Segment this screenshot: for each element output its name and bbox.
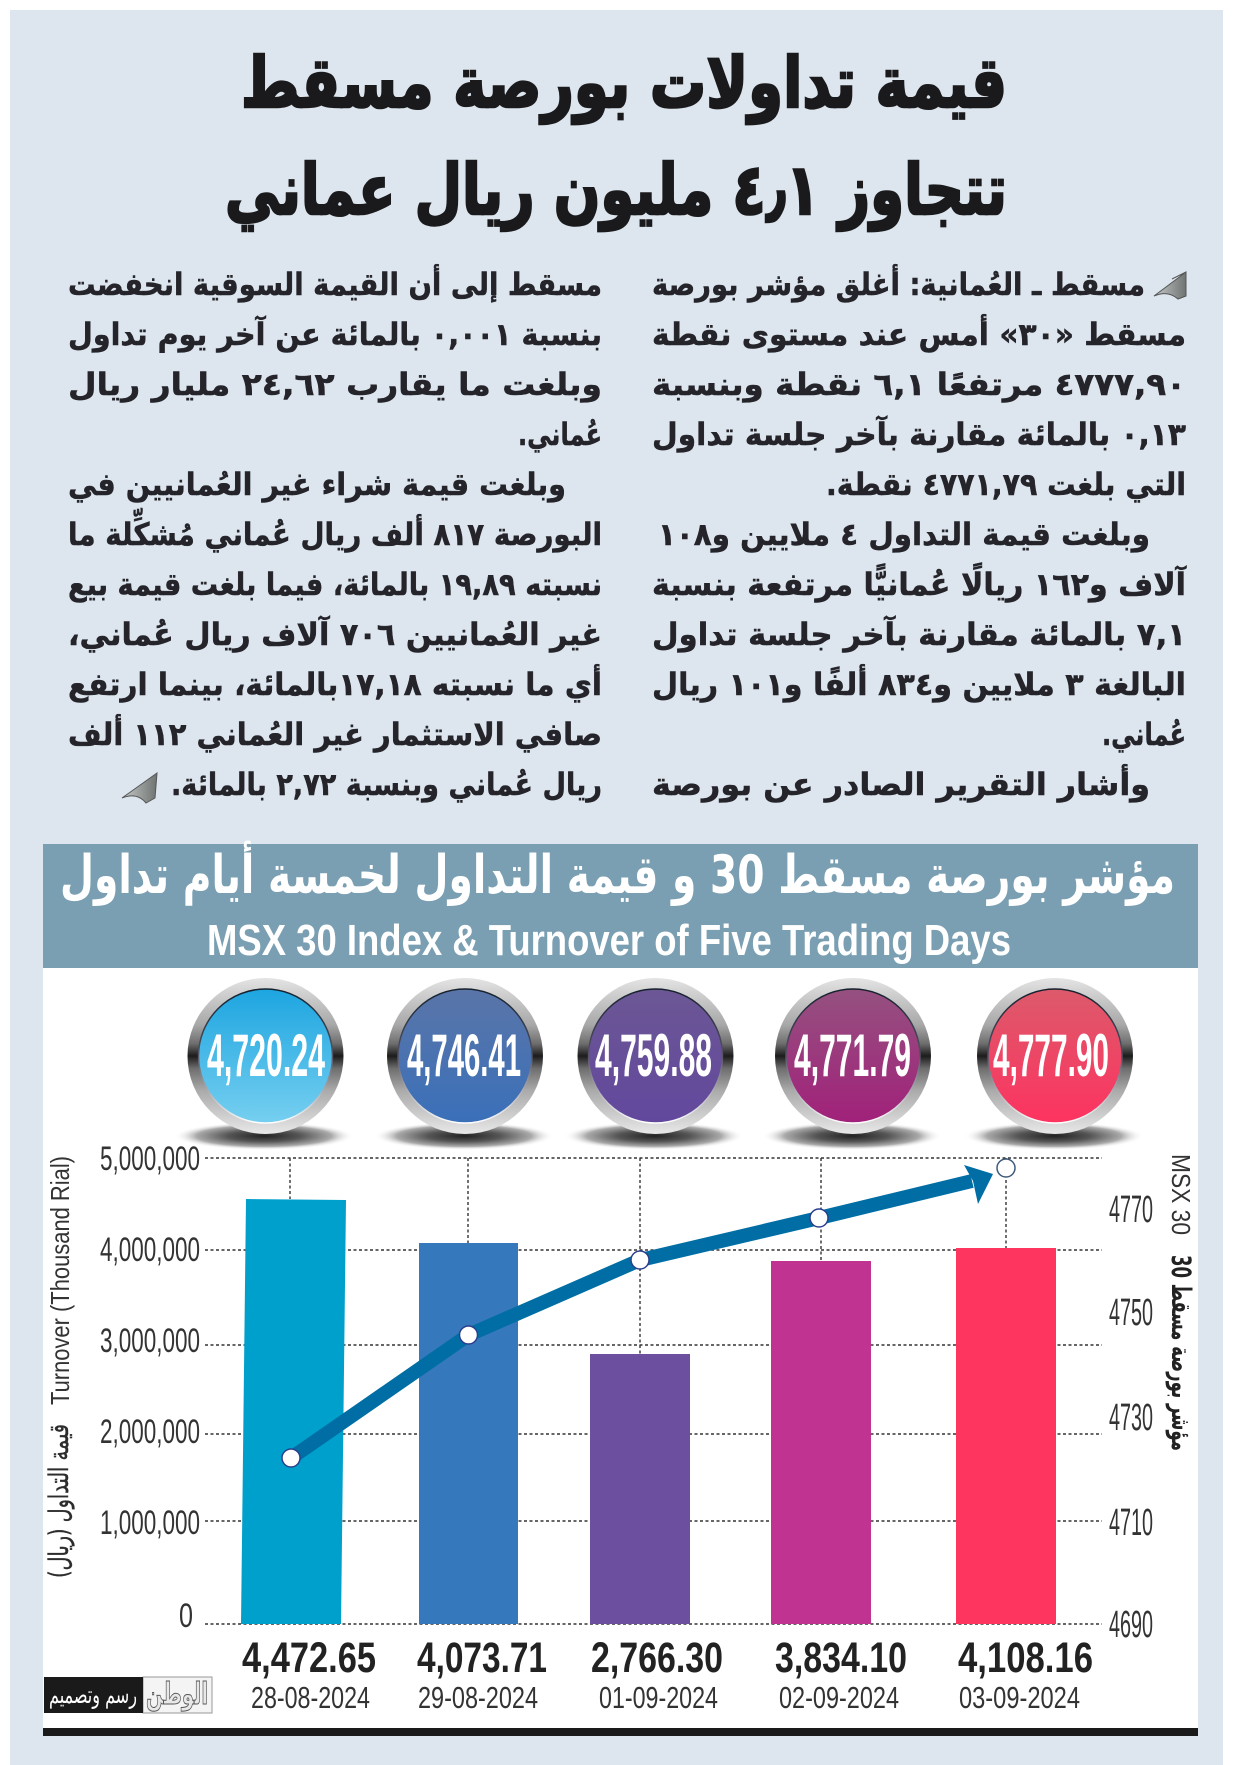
right axis labels: 4690 [1109,1604,1153,1646]
left axis labels: 2,000,000 [100,1413,200,1451]
right axis labels: 4730 [1109,1397,1153,1439]
left axis title: قيمة التداول (ريال) [44,1424,75,1578]
text block: right column [652,264,1187,803]
bar 02-09-2024 [771,1261,871,1624]
text block: left column: البورصة ٨١٧ ألف ريال عُماني مُشكِّلة ما [68,508,602,553]
dates [251,1680,1080,1715]
panel: chart [43,840,1198,1736]
turnover values: 4,073.71 [417,1634,547,1682]
heading: english chart title: MSX 30 Index & Turnover of Five Trading Days [207,916,1011,965]
right axis labels: 4770 [1109,1189,1153,1231]
text block: left column: صافي الاستثمار غير العُماني ١١٢ ألف [68,714,602,753]
text block: right column: ٤٧٧٧,٩٠ مرتفعًا ٦,١ نقطة وبنسبة [652,367,1186,403]
icon: sail marker left [122,773,157,803]
turnover values [242,1634,1093,1682]
text block: right column: مسقط ـ العُمانية: أغلق مؤشر بورصة [652,264,1145,303]
header band [43,840,1198,968]
badge 4,746.41: 4,746.41 [407,1022,521,1089]
left axis labels: 3,000,000 [100,1322,200,1360]
left axis labels: 0 [179,1597,193,1635]
text block: left column: أي ما نسبته ١٧,١٨بالمائة، بينما ارتفع [68,664,602,703]
text block: left column: مسقط إلى أن القيمة السوقية انخفضت [68,264,602,303]
text block: left column: بنسبة ٠,٠٠١ بالمائة عن آخر يوم تداول [68,315,602,353]
turnover values: 4,472.65 [242,1634,376,1682]
right axis labels: 4710 [1109,1502,1153,1544]
dates: 02-09-2024 [779,1680,899,1715]
text block: left column [68,264,602,803]
text block: right column: البالغة ٣ ملايين و٨٣٤ ألفًا و١٠١ ريال [652,664,1186,703]
badge 4,771.79: 4,771.79 [794,1022,911,1089]
logo credit: الوطن [146,1677,208,1712]
logo credit: رسم وتصميم [49,1681,137,1709]
bar 03-09-2024 [956,1248,1056,1624]
text block: left column: غير العُمانيين ٧٠٦ آلاف ريال عُماني، [68,615,602,653]
text block: left column: وبلغت قيمة شراء غير العُمانيين في [68,467,566,503]
title [225,42,1007,231]
text block: right column: آلاف و١٦٢ ريالًا عُمانيًّا مرتفعة بنسبة [652,562,1187,603]
arrow: index trend line [282,1159,1015,1467]
left axis labels: 5,000,000 [100,1140,200,1178]
badge 4,777.90 [964,978,1144,1150]
badge 4,777.90: 4,777.90 [993,1022,1109,1089]
dates: 28-08-2024 [251,1680,370,1715]
badge 4,759.88: 4,759.88 [595,1022,712,1089]
text block: right column: مسقط «٣٠» أمس عند مستوى نقطة [652,314,1186,353]
text block: right column: وبلغت قيمة التداول ٤ ملايين و١٠٨ [658,517,1150,553]
badge 4,720.24: 4,720.24 [207,1022,325,1089]
left axis labels: 1,000,000 [100,1504,200,1542]
badge 4,771.79 [762,978,942,1150]
left axis labels: 4,000,000 [100,1231,200,1269]
left axis title [44,1156,75,1578]
turnover values: 2,766.30 [591,1634,723,1682]
left axis labels [100,1140,200,1635]
turnover values: 4,108.16 [958,1634,1093,1682]
dates: 03-09-2024 [959,1680,1080,1715]
text block: left column: وبلغت ما يقارب ٢٤,٦٢ مليار ريال [68,367,602,403]
title: قيمة تداولات بورصة مسقط [241,42,1007,124]
bar 01-09-2024 [590,1354,690,1624]
index badges [174,978,1144,1150]
right axis labels: 4750 [1109,1292,1153,1334]
icon: sail marker right [1154,272,1186,299]
badge 4,720.24 [174,978,354,1150]
text block: left column: عُماني. [518,417,602,453]
logo credit [44,1677,212,1713]
text block: left column: ريال عُماني وبنسبة ٢,٧٢ بالمائة. [171,767,602,803]
badge 4,746.41 [374,978,554,1150]
right axis title: MSX 30 [1166,1154,1196,1235]
text block: right column: وأشار التقرير الصادر عن بورصة [652,764,1150,803]
bar 29-08-2024 [419,1243,518,1624]
right axis labels [1109,1189,1153,1646]
turnover values: 3,834.10 [775,1634,907,1682]
title: تتجاوز ٤٫١ مليون ريال عماني [225,149,1007,231]
text block: right column: عُماني. [1102,717,1186,753]
right axis title: مؤشر بورصة مسقط 30 [1165,1255,1196,1451]
chart: turnover bars and index line [205,1158,1102,1624]
text block: right column: ٧,١ بالمائة مقارنة بآخر جلسة تداول [652,615,1186,653]
bar 28-08-2024 [241,1199,346,1624]
left axis title: Turnover (Thousand Rial) [45,1156,75,1405]
text block: right column: ٠,١٣ بالمائة مقارنة بآخر جلسة تداول [652,415,1186,453]
text block: left column: نسبته ١٩,٨٩ بالمائة، فيما بلغت قيمة بيع [68,567,602,603]
badge 4,759.88 [564,978,744,1150]
right axis title [1165,1154,1196,1451]
footer rule [43,1728,1198,1736]
dates: 29-08-2024 [418,1680,538,1715]
dates: 01-09-2024 [599,1680,718,1715]
text block: right column: التي بلغت ٤٧٧١,٧٩ نقطة. [826,467,1186,503]
